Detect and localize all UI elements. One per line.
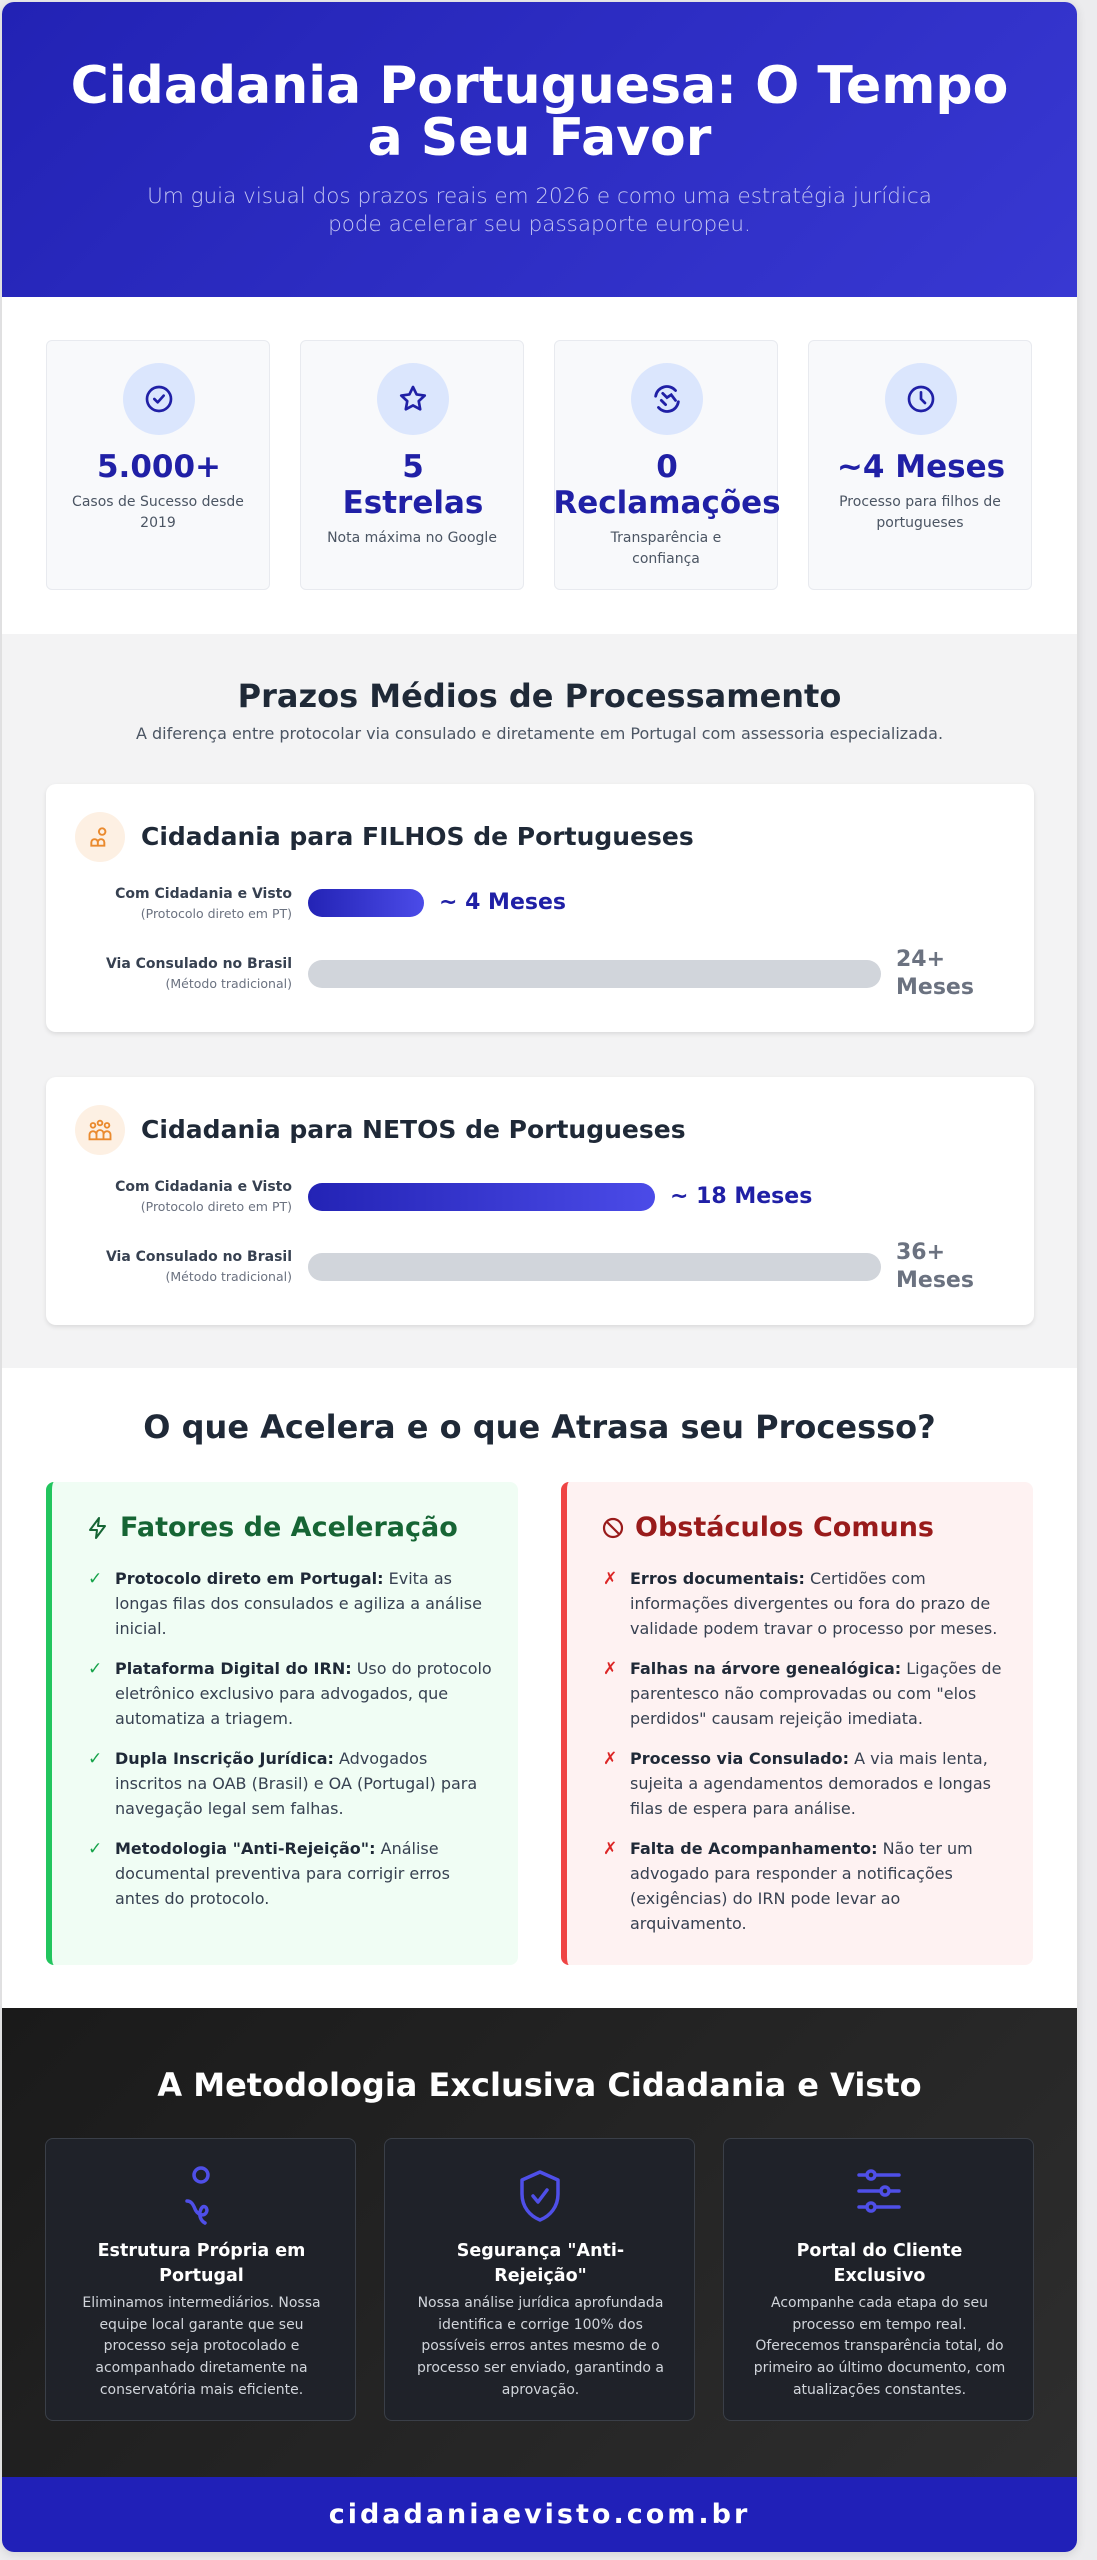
stat card: complaints: 0 (656, 449, 678, 485)
icon: handshake (631, 363, 703, 435)
card: netos (46, 1077, 1034, 1325)
heading: A Metodologia Exclusiva Cidadania e Visto (157, 2066, 922, 2104)
icon: star (377, 363, 449, 435)
card: netos: 36+ (896, 1240, 945, 1265)
card title: Cidadania para NETOS de Portugueses (141, 1115, 686, 1144)
card: netos: ~ 18 Meses (670, 1184, 812, 1209)
icon: sliders (857, 2169, 901, 2213)
icon: check circle (123, 363, 195, 435)
bar: direct: Com Cidadania e Visto (115, 886, 292, 902)
panel heading: Fatores de Aceleração (120, 1512, 458, 1543)
list: obstacles: ✗ (603, 1659, 617, 1679)
bar: consulate: Via Consulado no Brasil (106, 1249, 292, 1265)
bar: consulate: (Método tradicional) (166, 1269, 292, 1284)
list: factors: Protocolo direto em Portugal: Evita as longas filas dos consulados e agiliza a análise inicial. (115, 1569, 482, 1638)
list: factors: Metodologia "Anti-Rejeição": Análise documental preventiva para corrigir erros antes do protocolo. (115, 1839, 450, 1908)
subtitle: Um guia visual dos prazos reais em 2026 e como uma estratégia jurídica (147, 184, 932, 209)
card: structure: Estrutura Própria em Portugal (98, 2241, 305, 2286)
stat card: cases: 5.000+ (97, 449, 221, 485)
bar: direct (115, 886, 292, 921)
card: security (384, 2138, 695, 2421)
card: portal: Portal do Cliente Exclusivo (797, 2241, 962, 2286)
list: obstacles: ✗ (603, 1749, 617, 1769)
section: methodology (2, 2008, 1077, 2479)
card: netos: Meses (896, 1268, 974, 1293)
list: factors: Plataforma Digital do IRN: Uso do protocolo eletrônico exclusivo para advogados, que automatiza a triagem. (115, 1659, 492, 1728)
subtitle (147, 184, 932, 237)
icon: clock (885, 363, 957, 435)
list: obstacles: ✗ (603, 1839, 617, 1859)
list: factors: ✓ (88, 1569, 102, 1589)
icon: route (185, 2166, 210, 2225)
heading: accelerate vs delay: O que Acelera e o que Atrasa seu Processo? (143, 1408, 936, 1446)
list: obstacles: ✗ (603, 1569, 617, 1589)
list: obstacles: Processo via Consulado: A via mais lenta, sujeita a agendamentos demorados e longas filas de espera para análise. (630, 1749, 991, 1818)
header banner (2, 2, 1077, 297)
bar: direct: Com Cidadania e Visto (115, 1179, 292, 1195)
stat card: stars: Estrelas (343, 485, 483, 521)
footer (2, 2477, 1077, 2552)
card: structure: Eliminamos intermediários. Nossa equipe local garante que seu processo seja protocolado e acompanhado diretamente na conservatória mais eficiente. (82, 2295, 321, 2398)
stat card: cases (46, 340, 270, 590)
panel: acceleration factors (46, 1482, 518, 1965)
card: security: Segurança "Anti-Rejeição" (457, 2241, 624, 2286)
stat card: cases: Casos de Sucesso desde 2019 (72, 494, 244, 531)
card: security: Nossa análise jurídica aprofundada identifica e corrige 100% dos possíveis erros antes mesmo de o processo ser enviado, garantindo a aprovação. (417, 2295, 664, 2398)
list: factors: ✓ (88, 1659, 102, 1679)
list: obstacles: Falta de Acompanhamento: Não ter um advogado para responder a notificações (exigências) do IRN pode levar ao arquivamento. (630, 1839, 973, 1933)
bar: direct: (Protocolo direto em PT) (141, 906, 292, 921)
card: filhos: 24+ (896, 947, 945, 972)
list: factors (88, 1569, 492, 1908)
title (71, 56, 1008, 168)
stat card: stars: Nota máxima no Google (327, 530, 497, 546)
heading: Prazos Médios de Processamento (238, 677, 841, 715)
bar: direct: (Protocolo direto em PT) (141, 1199, 292, 1214)
title: Cidadania Portuguesa: O Tempo (71, 56, 1008, 116)
subheading: A diferença entre protocolar via consulado e diretamente em Portugal com assessoria especializada. (136, 724, 943, 743)
bar: consulate (106, 956, 292, 991)
bar: consulate: Via Consulado no Brasil (106, 956, 292, 972)
stat card: months: ~4 Meses (837, 449, 1005, 485)
card: portal: Acompanhe cada etapa do seu processo em tempo real. Oferecemos transparência total, do primeiro ao último documento, com atualizações constantes. (754, 2295, 1005, 2398)
stat card: months: Processo para filhos de portugueses (839, 494, 1001, 531)
stat card: months (808, 340, 1032, 590)
stat card: complaints: Reclamações (553, 485, 781, 521)
card: filhos: Meses (896, 975, 974, 1000)
list: obstacles: Erros documentais: Certidões com informações divergentes ou fora do prazo de validade podem travar o processo por meses. (630, 1569, 997, 1638)
panel heading: Obstáculos Comuns (635, 1512, 934, 1543)
list: factors: Dupla Inscrição Jurídica: Advogados inscritos na OAB (Brasil) e OA (Portugal) para navegação legal sem falhas. (115, 1749, 477, 1818)
bar: direct (115, 1179, 292, 1214)
card: filhos: ~ 4 Meses (439, 890, 566, 915)
icon: shield (520, 2170, 560, 2222)
card: structure (45, 2138, 356, 2421)
bar: consulate (106, 1249, 292, 1284)
card: portal (723, 2138, 1034, 2421)
list: obstacles (603, 1569, 1001, 1933)
stat card: complaints (554, 340, 778, 590)
list: factors: ✓ (88, 1749, 102, 1769)
card title: Cidadania para FILHOS de Portugueses (141, 822, 694, 851)
stat card: stars (300, 340, 524, 590)
card: filhos (46, 784, 1034, 1032)
stat card: complaints: Transparência e confiança (611, 530, 721, 567)
title: a Seu Favor (368, 108, 711, 168)
subtitle: pode acelerar seu passaporte europeu. (328, 212, 751, 237)
icon: person (75, 812, 125, 862)
list: obstacles: Falhas na árvore genealógica: Ligações de parentesco não comprovadas ou com "elos perdidos" causam rejeição imediata. (630, 1659, 1001, 1728)
bar: consulate: (Método tradicional) (166, 976, 292, 991)
section: processing times (2, 634, 1077, 1368)
footer: cidadaniaevisto.com.br (329, 2499, 750, 2530)
icon: family (75, 1105, 125, 1155)
list: factors: ✓ (88, 1839, 102, 1859)
panel: common obstacles (561, 1482, 1033, 1965)
stat card: stars: 5 (402, 449, 424, 485)
